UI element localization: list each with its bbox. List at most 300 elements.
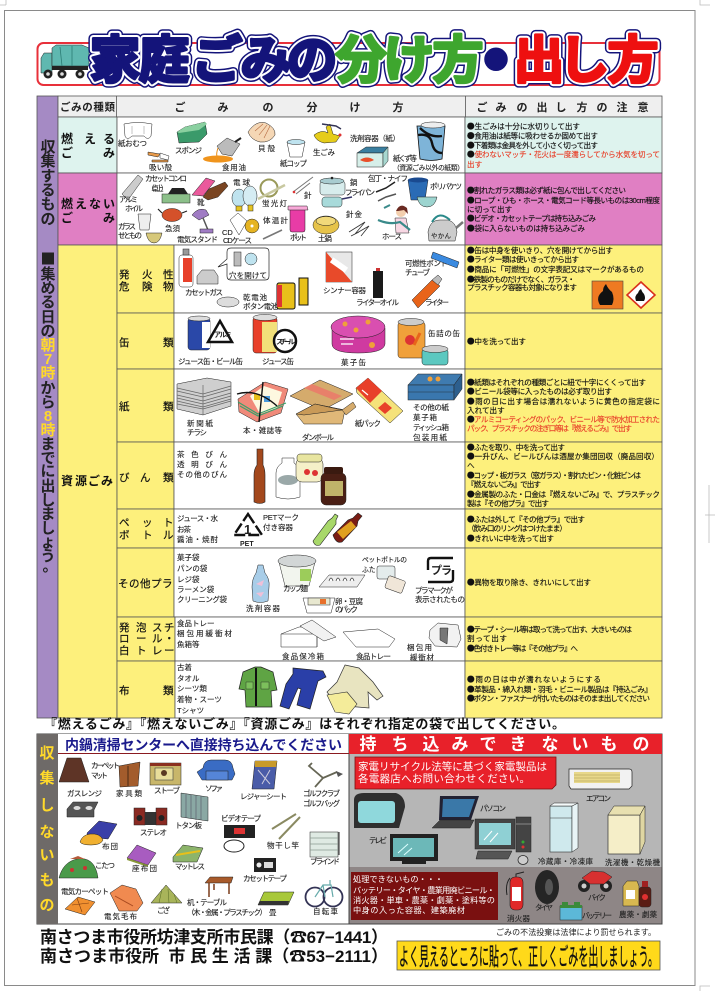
styrofoam label [119,621,174,657]
item: battery: バッテリー [582,911,612,920]
item: jam jar [296,454,323,482]
item: desktop computer [475,817,531,864]
icon: flammable diamond [627,282,655,308]
item: stereo [134,808,167,837]
flammable label [119,268,174,293]
icon: plastic recycling mark: プラマークが [415,585,454,595]
paper notes: ●雨の日に出す場合は濡れないように黄色の指定袋に [467,396,660,407]
contact information [40,927,388,966]
item: instant noodle cup [278,555,316,593]
item: PET bottle caps: ペットボトルの [362,556,407,564]
icon: PET recycling mark: PET [240,541,254,548]
callout: punch holes [218,248,269,280]
item: flammable bond tube [405,252,459,277]
item: furniture: 家具類 [116,788,142,798]
item: paper carton: 紙パック [355,418,381,428]
item: mattress: マットレス [175,862,205,871]
item: other paper: sweets box: ティッシュ箱 [413,422,450,432]
item: packing cushion [407,623,461,662]
item: thermos pot [288,206,308,242]
bottles notes: 製は『その他プラ』で出す [467,498,549,508]
item: fluorescent lamp: 蛍光灯 [262,198,288,208]
title text: 家庭ごみの [89,32,338,89]
item: thermos pot: ポット [290,233,307,242]
burnable notes: ●下着類は金具を外して小さく切って出す [467,140,598,151]
item: other paper: sweets box: その他の紙 [413,402,450,412]
title text: 出し方 [513,32,659,89]
item: golf clubs: ゴルフバッグ [303,798,340,808]
paper notes [467,377,660,433]
plastics types list: クリーニング袋 [177,594,228,604]
item: electric blanket [104,885,143,921]
icon: plastic recycling mark: 表示されたもの [415,594,465,604]
item: thinner container [323,252,366,295]
item: table: 机・テーブル [187,897,228,907]
cans notes: ●中を洗って出す [467,336,526,347]
item: pot and frying pan: 鍋 [350,177,358,187]
item: video tape [221,813,262,852]
left purple column: collected items schedule: 集める日の [40,265,56,340]
item: cooking oil: 食用油 [222,162,246,172]
item: earthenware pot [313,216,339,243]
styrofoam notes [467,624,632,654]
item: kettle [428,215,463,241]
callout: appliance recycling law: 各電器店へお問い合わせください。 [358,772,530,785]
cloth notes: ●ボタン・ファスナーが付いたものはそのまま出してください [467,693,650,704]
row: cloth [117,661,662,718]
cloth types list: シーツ類 [177,683,207,693]
item: food cooler box [281,620,336,661]
item: thermometer [263,215,288,239]
item: teapot [158,208,187,233]
cloth types list: タオル [177,674,200,683]
callout: items that cannot be processed: 消火器・単車・農薬・劇薬・塗料等の [353,895,495,905]
item: other paper: sweets box: 包装用紙 [413,432,448,442]
styrofoam label: 発泡スチ [119,621,174,634]
item: paper cup [280,140,308,168]
left purple column: collected items schedule: から [40,380,56,411]
item: tire [535,870,559,912]
bottles notes [467,442,660,508]
item: desk lamp [177,209,218,244]
item: canned food: 缶詰の缶 [428,328,460,338]
styrofoam types list [177,619,232,649]
PET label [119,517,174,542]
paper notes: ●ビニール袋等に入ったものは必ず取り出す [467,386,612,397]
item: washing machine [605,806,660,867]
item: person with hose [378,205,410,241]
item: golf clubs: ゴルフクラブ [303,788,340,798]
item: juice can with steel mark: スチール [276,338,295,346]
not accepted heading: 持ち込みできないもの [360,735,650,754]
item: pot and frying pan [320,177,375,207]
item: air conditioner: エアコン [586,794,611,803]
bag instruction line: 『燃えるごみ』『燃えないごみ』『資源ごみ』はそれぞれ指定の袋で出してください。 [44,716,565,732]
PET label: ボトル [119,530,174,542]
item: battery [560,902,612,920]
cloth types list [177,662,222,715]
item: table [187,877,277,917]
item: shell: 貝殻 [258,143,276,153]
flammable label: 危険物 [119,280,174,293]
item: thinner container: シンナー容器 [323,285,366,295]
item: books and magazines: 本・雑誌等 [243,425,282,435]
panel: items not collected, bring to center [37,734,349,924]
item: kitchen knives: 包丁・ナイフ [368,173,408,183]
item: tofu pack: のパック [335,605,358,614]
item: golf clubs [303,763,343,808]
item: pesticide and chemicals: 農薬・劇薬 [619,909,658,919]
PET mark caption: 付き容器 [263,522,294,532]
item: bicycle [306,880,342,916]
styrofoam types list: 梱包用緩衝材 [177,628,232,638]
item: paper scraps: 紙くず等 [393,153,418,163]
item: juice and beer cans with aluminium mark: アルミ [214,331,232,339]
non-burnable notes: に切って出す [467,204,513,214]
icon: PET recycling mark: 1 [244,522,251,537]
item: aluminium foil: ホイル [125,204,144,213]
row: bottles [117,442,662,509]
item: electric carpet: 電気カーペット [61,886,109,896]
non-burnable notes: ●ロープ・ひも・ホース・電気コード等長いものは30cm程度 [467,195,660,206]
bottles notes: ●ふたを取り、中を洗って出す [467,442,565,453]
item: sweets tin: 菓子缶 [341,357,366,367]
cloth types list: Tシャツ [177,706,204,715]
item: food tray [343,629,395,661]
center heading: 内鍋清掃センターへ直接持ち込んでください [65,737,342,753]
item: cassette stove [145,174,190,203]
item: juice can with steel mark [253,314,296,366]
item: cardboard: ダンボール [302,432,334,442]
item: aluminium foil: アルミ [119,195,138,204]
cloth notes: ●雨の日は中が濡れないようにする [467,674,601,685]
non-burnable notes: ●袋に入らないものは持ち込みごみ [467,223,585,234]
PET types list: お茶 [177,524,192,534]
item: washing machine: 洗濯機・乾燥機 [605,857,660,867]
item: CD and CD case [222,213,259,245]
item: kotatsu [59,856,115,878]
item: detergent bottle: 洗剤容器 [246,603,280,613]
burnable notes [467,121,660,169]
item: motorbike [578,871,612,902]
item: dry cell and button batteries: ボタン電池 [243,301,278,311]
item: corrugated sheet [175,793,208,830]
PET types list: ジュース・水 [177,513,218,523]
item: corrugated sheet: トタン板 [175,820,202,830]
paper notes: 入れて出す [467,405,505,415]
item: kettle: やかん [431,232,452,240]
panel: burnable waste [58,117,662,173]
title text [89,13,659,112]
item: furniture [116,762,142,798]
item: CD and CD case: CD [222,228,233,237]
item: paper carton [355,378,403,428]
item: cassette stove: （卓上） [147,183,168,193]
item: light bulbs [232,177,257,211]
item: glass and ceramics: せともの [118,231,142,240]
callout: punch holes: 穴を開けて [229,271,267,280]
item: laptop [432,796,506,828]
item: air conditioner [569,769,632,803]
item: cassette tape [243,858,288,883]
item: cooking oil [203,138,246,172]
item: table: （木・金属・プラスチック） [187,907,267,917]
PET types list: 醤油・焼酎 [177,534,218,544]
non-burnable heading: 燃えない [61,196,115,211]
burnable notes: ●生ごみは十分に水切りして出す [467,121,580,132]
row: other plastics [117,548,662,617]
item: pot and frying pan: フライパン [345,188,375,197]
item: shoes [192,178,228,207]
item: other paper: sweets box [408,374,462,442]
item: sponge: スポンジ [175,146,202,155]
left purple column: collected items schedule: ■ [40,248,56,269]
bottles notes: へ [467,461,475,470]
item: food cooler box: 食品保冷箱 [282,651,324,661]
item: cassette gas: カセットガス [185,287,223,297]
flammable label: 発火性 [119,268,174,281]
bottle types list [177,449,228,479]
bottle types list: 透明びん [177,460,228,469]
PET notes [467,514,585,544]
item: paper cup: 紙コップ [280,158,308,168]
item: person with hose: ホース [382,232,402,241]
item: food waste [313,124,342,157]
item: lighter [412,275,449,308]
item: fire extinguisher: 消火器 [507,913,530,923]
item: instant noodle cup: カップ麺 [283,583,308,593]
item: newspapers: チラシ [187,428,207,437]
item: packing cushion: 緩衝材 [410,652,434,662]
PET notes: ●ふたは外して『その他プラ』で出す [467,514,585,525]
item: leisure sheet: レジャーシート [240,792,287,801]
styrofoam notes: ●テープ・シール等は取って洗って出す、大きいものは [467,624,632,635]
left purple column: collected items schedule: 収集するもの [40,139,56,228]
item: lighter oil [356,268,400,307]
item: glass and ceramics [118,214,162,243]
item: juice and beer cans with aluminium mark [178,316,244,366]
item: plastic bucket [408,178,462,207]
paper notes: パック、プラスチックの注ぎ口等は『燃えるごみ』で出す [467,423,632,433]
paper notes: ●紙類はそれぞれの種類ごとに紐で十字にくくって出す [467,377,646,388]
panel: burnable waste: ごみ [61,145,115,160]
item: cassette gas [179,249,223,297]
bottle types list: 茶色びん [177,449,228,459]
cloth notes [467,674,652,704]
item: food waste: 生ごみ [313,147,336,157]
item: other paper: sweets box: 菓子箱 [413,412,438,422]
item: cigarette butts [148,152,172,172]
other plastics notes: ●異物を取り除き、きれいにして出す [467,577,591,588]
item: table: 畳 [269,908,277,917]
item: tofu pack: 卵・豆腐 [335,596,364,606]
item: paper detergent box: 洗剤容器（紙） [350,133,400,143]
flammable notes: ●鉄製のものだけでなく、ガラス・ [467,274,575,285]
item: cassette tape: カセットテープ [243,874,288,883]
PET notes: （飲み口のリングはつけたまま） [467,523,567,533]
bottles notes: ●金属製のふた・口金は『燃えないごみ』で、プラスチック [467,489,660,500]
item: fire extinguisher [506,872,530,923]
left purple column: collected items schedule: 朝7時 [40,336,56,382]
item: lighter oil: ライターオイル [356,298,400,307]
item: electric carpet [61,886,109,915]
non-burnable notes: ●ビデオ・カセットテープは持ち込みごみ [467,213,596,224]
flammable notes: ●商品に「可燃性」の文字表記又はマークがあるもの [467,264,644,275]
item: floor cushion: 座布団 [132,863,157,873]
item: wire [346,209,369,236]
item: lighter: ライター [425,298,449,307]
left purple column: collected items schedule [37,96,58,718]
item: electric blanket: 電気毛布 [104,911,138,921]
item: shell [248,122,276,153]
panel: non-burnable waste [58,173,662,245]
item: straw mat [151,885,182,915]
panel: items not accepted [349,734,662,924]
plastics types list: パンの袋 [177,563,208,573]
item: heater [150,763,181,795]
item: books and magazines [237,382,288,435]
item: canned food [398,318,460,365]
PET types list [177,513,218,544]
item: video tape: ビデオテープ [221,813,262,823]
item: cassette stove: カセットコンロ [145,174,187,183]
item: drying poles [267,814,300,850]
item: newspapers [177,378,231,437]
item: dry cell and button batteries [217,278,308,311]
callout: items that cannot be processed [351,872,498,920]
plastics types list: ラーメン袋 [177,584,215,594]
item: PET bottle caps: ふた [362,566,376,574]
item: thermometer: 体温計 [263,215,288,225]
item: floor cushion [127,845,157,873]
styrofoam label: 白トレー [119,644,174,657]
burnable notes: 出す [467,159,483,169]
burnable notes: ●食用油は紙等に吸わせるか固めて出す [467,130,598,142]
item: earthenware pot: 土鍋 [318,233,332,243]
item: food tray: 食品トレー [356,652,391,661]
icon: PET recycling mark [234,514,262,548]
item: drying poles: 物干し竿 [267,840,300,850]
item: sofa [197,760,235,793]
item: leisure sheet [240,761,287,801]
non-burnable notes [467,185,660,234]
bottle types list: その他のびん [177,469,228,479]
item: PET bottle caps [362,556,407,594]
cloth types list: 着物・スーツ [177,694,222,704]
row: PET bottles [117,509,662,548]
item: motorbike: バイク [588,893,606,902]
item: flat television [390,834,438,864]
PET mark caption: PETマーク [263,513,299,522]
callout: items that cannot be processed: バッテリー・タイヤ・農業用廃ビニール・ [353,885,495,895]
item: needles [293,177,313,200]
item: juice and beer cans with aluminium mark: ジュース缶・ビール缶 [178,356,244,366]
item: cardboard [290,380,356,442]
item: laptop: パソコン [480,804,506,813]
item: shoes: 靴 [197,197,205,207]
plastics types list: レジ袋 [177,574,200,584]
bottles notes: 『燃えないごみ』で出す [467,479,541,489]
PET notes: ●きれいに中を洗って出す [467,533,554,544]
row: paper [117,369,662,442]
item: CD and CD case: CDケース [223,236,252,245]
styrofoam label: ロール・ [119,633,174,645]
icon: plastic recycling mark [415,558,465,604]
item: blinds: ブラインド [310,856,340,866]
panel: non-burnable waste: ごみ [61,210,115,225]
title text: 分け方 [335,32,484,89]
table header row: ごみの分け方 [174,100,404,114]
item: tire: タイヤ [535,903,553,912]
item: refrigerator [538,803,594,866]
item: packing cushion: 梱包用 [407,642,432,652]
item: beige garments [327,665,383,714]
item: dry cell and button batteries: 乾電池 [243,292,268,302]
item: paper detergent box [350,133,400,167]
cans label: 缶類 [119,336,174,349]
item: plastic bucket: ポリバケツ [430,182,462,191]
callout: items that cannot be processed: 処理できないもの・・・ [353,874,443,884]
table header row [58,96,662,117]
row: styrofoam and white trays [117,617,662,662]
icon: garbage truck [41,45,89,78]
title frame [38,43,660,85]
item: blue jeans [280,668,326,709]
item: refrigerator: 冷蔵庫・冷凍庫 [538,856,594,866]
item: green PET bottle [313,514,338,546]
other plastics label: その他プラ [118,577,172,590]
item: futon: 布団 [102,841,118,851]
row: cans [117,313,662,369]
item: clear jar [276,458,300,499]
item: sponge [175,122,207,155]
item: stereo: ステレオ [140,828,167,837]
cloth types list: 古着 [177,662,192,672]
plastics types list [177,552,228,604]
burnable heading: 燃える [61,131,115,146]
item: dark jar [321,467,346,505]
bottles notes: ●一升びん、ビールびんは酒屋か集団回収（廃品回収） [467,451,659,462]
panel: recyclable waste category: 資源ごみ [61,473,113,488]
item: cigarette butts: 吸い殻 [149,162,172,172]
callout: appliance recycling law: 家電リサイクル法等に基づく家電製品は [358,760,547,773]
item: carpet mat: カーペット [91,761,120,770]
flammable notes: プラスチック容器も対象になります [467,282,577,292]
item: flammable bond tube: チューブ [405,267,430,277]
item: straw mat: ござ [157,905,170,915]
side label: not collected [37,734,58,924]
contact information: 南さつま市役所 市 民 生 活 課（☎53−2111） [40,946,388,966]
item: egg carton [319,575,365,587]
styrofoam notes: 割って出す [467,633,507,643]
title text: 家庭ごみの分け方出し方 [89,32,659,89]
styrofoam notes: ●色付きトレー等は『その他プラ』へ [467,643,578,654]
bottles label: びん類 [119,472,174,484]
left purple column: collected items schedule: までに出しましょう。 [40,436,58,575]
item: newspapers: 新聞紙 [187,418,214,428]
item: gas range [67,788,102,817]
title banner [38,13,660,112]
item: desk lamp: 電気スタンド [177,234,218,244]
PET label: ペット [119,517,174,529]
item: carpet mat [59,758,120,782]
item: futon [80,821,118,851]
styrofoam types list: 魚箱等 [177,639,200,649]
item: paper scraps: （資源ごみ以外の紙類） [393,163,464,172]
item: tatami [258,892,294,905]
item: kotatsu: こたつ [95,861,115,870]
item: CRT television: テレビ [369,836,387,845]
